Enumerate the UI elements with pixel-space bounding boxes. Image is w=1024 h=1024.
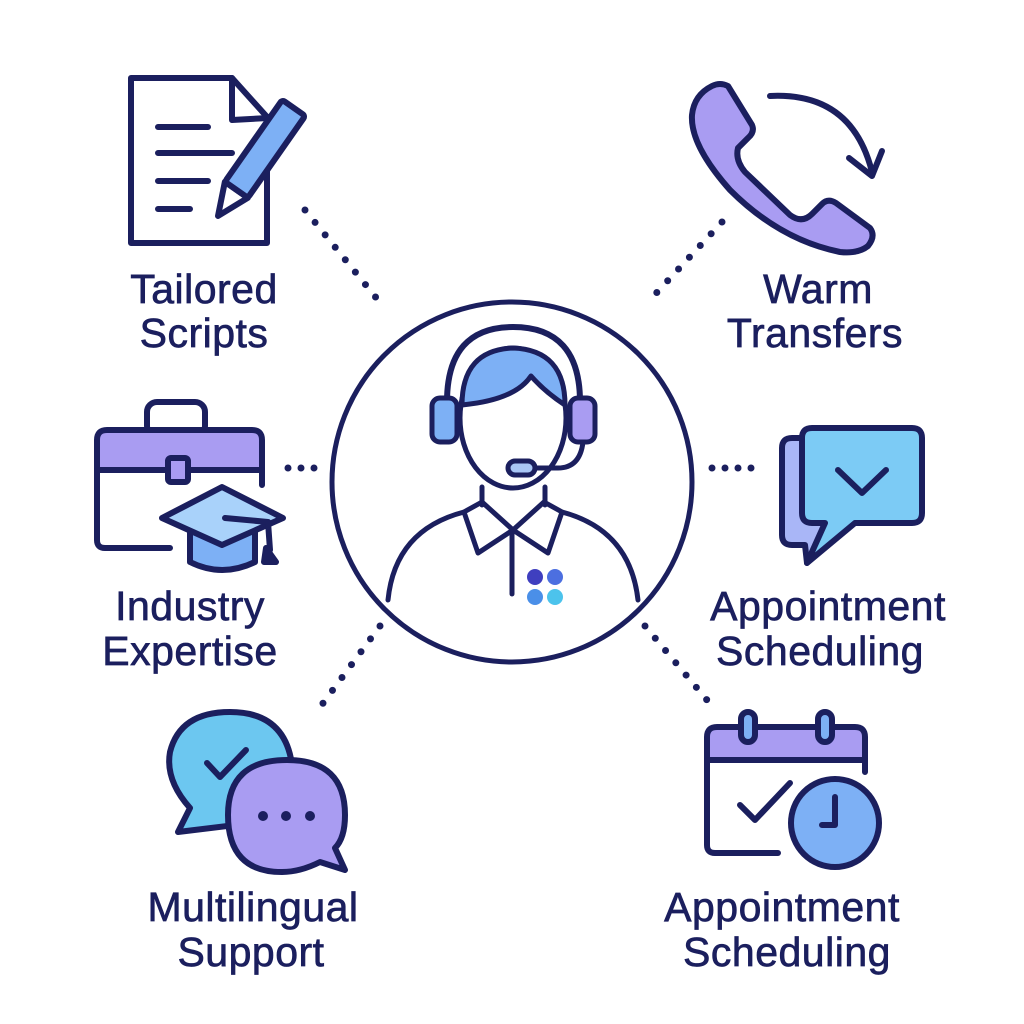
label: Industry Expertise: Industry	[115, 583, 265, 629]
label: Appointment Scheduling (bottom): Appointment	[664, 884, 900, 930]
label: Appointment Scheduling (bottom): Scheduling	[683, 929, 891, 975]
connector: bottom-right	[645, 626, 712, 706]
connector: left	[288, 464, 315, 472]
label: Tailored Scripts: Scripts	[140, 310, 268, 356]
label: Multilingual Support: Support	[177, 929, 325, 975]
connector: top-left	[305, 210, 382, 305]
icon: multilingual bubbles	[169, 712, 345, 872]
icon: calendar with clock	[707, 712, 879, 867]
label: Multilingual Support: Multilingual	[147, 884, 359, 930]
label: Tailored Scripts: Tailored	[130, 266, 278, 312]
icon: agent	[388, 327, 638, 605]
central circle with agent	[332, 302, 692, 662]
label: Appointment Scheduling (right): Appointment	[710, 583, 946, 629]
label: Industry Expertise: Expertise	[102, 628, 278, 674]
connector: bottom-left	[318, 626, 380, 710]
connector: top-right	[648, 222, 722, 302]
icon: chat bubbles with chevron	[782, 428, 922, 563]
connector: right	[712, 464, 752, 472]
icon: phone with arrow	[692, 84, 882, 252]
icon: document with pencil	[131, 78, 305, 243]
label: Warm Transfers: Warm	[763, 266, 873, 312]
icon: briefcase with graduation cap	[97, 402, 283, 570]
label: Appointment Scheduling (right): Scheduling	[716, 628, 924, 674]
label: Warm Transfers: Transfers	[727, 310, 903, 356]
